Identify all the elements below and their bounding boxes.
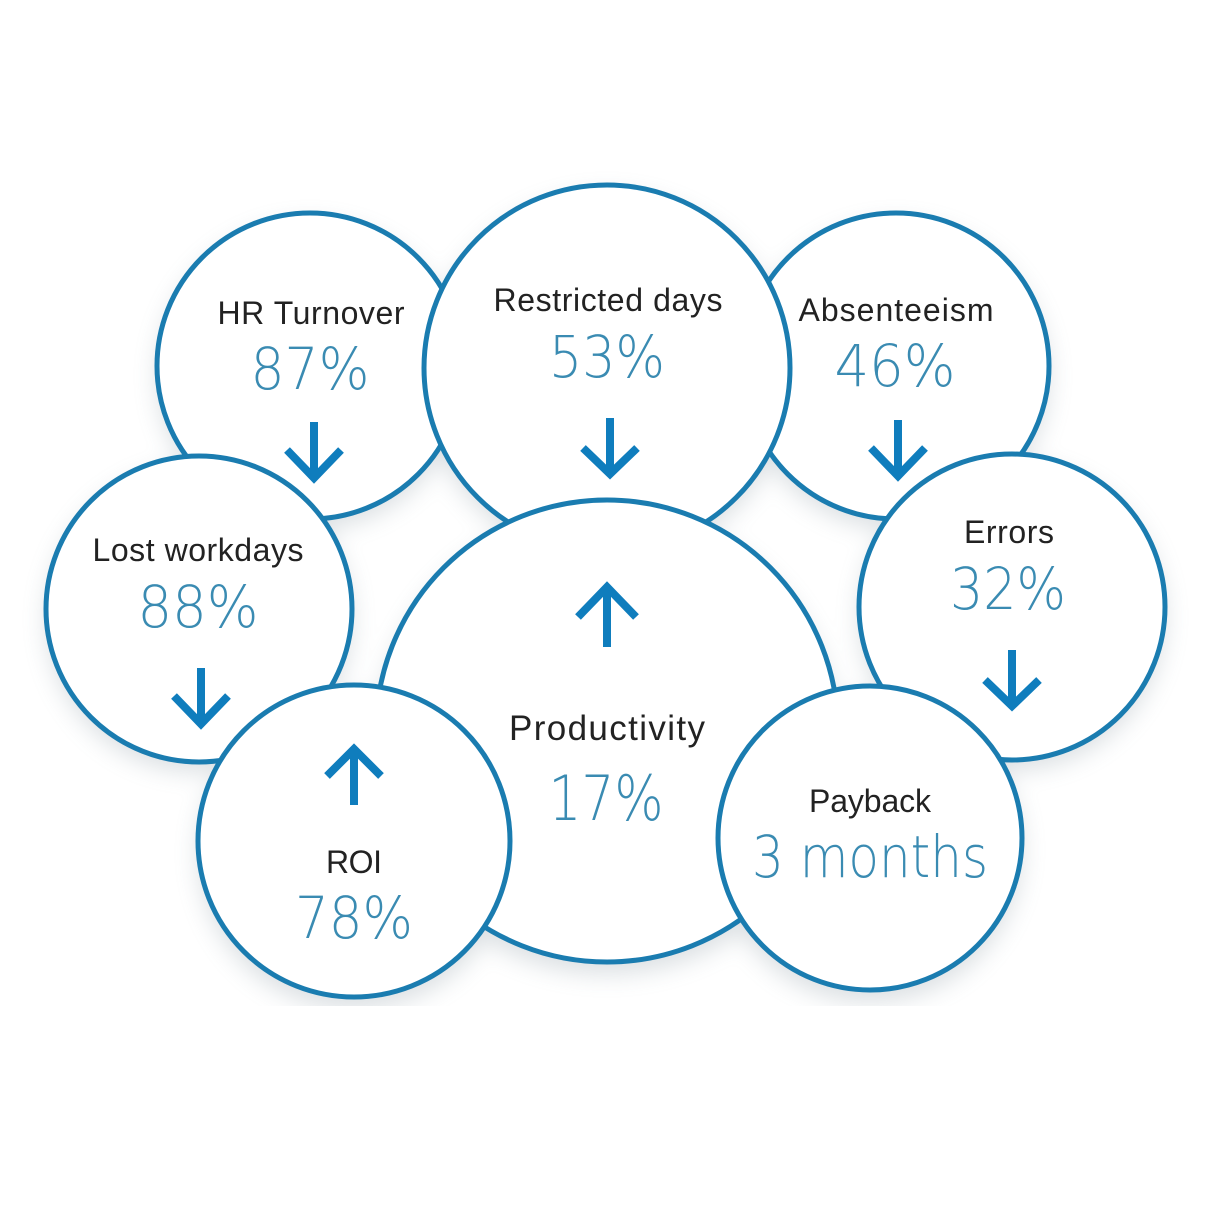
label: ROI: ROI — [326, 844, 382, 880]
arrow: down — [174, 668, 228, 724]
circle: Productivity — [376, 500, 838, 962]
value: 17%: 17% — [548, 762, 664, 835]
circle: Lost workdays — [46, 456, 352, 762]
label: Absenteeism: Absenteeism — [798, 292, 994, 328]
label: Productivity: Productivity — [509, 709, 706, 748]
circle: Absenteeism — [743, 213, 1049, 519]
value: 78%: 78% — [295, 884, 413, 952]
circle: Restricted days — [424, 185, 790, 551]
arrow: down — [985, 650, 1039, 706]
label: Lost workdays: Lost workdays — [92, 532, 304, 568]
value: 53%: 53% — [549, 323, 665, 391]
value: 32%: 32% — [950, 555, 1066, 623]
circle: Errors — [859, 454, 1165, 760]
label: Restricted days: Restricted days — [494, 282, 722, 318]
arrow: down — [287, 422, 341, 478]
value: 88%: 88% — [138, 573, 258, 641]
label: HR Turnover: HR Turnover — [218, 295, 405, 331]
circle: ROI — [198, 685, 510, 997]
arrow: down — [583, 418, 637, 474]
value: 3 months: 3 months — [752, 823, 988, 891]
arrow: up — [327, 749, 381, 805]
label: Payback: Payback — [809, 783, 932, 819]
circle: HR Turnover — [157, 213, 463, 519]
circle: Payback — [718, 686, 1022, 990]
label: Errors: Errors — [964, 514, 1054, 550]
value: 87%: 87% — [250, 335, 370, 403]
soft shadow — [46, 195, 1165, 1009]
arrow: up — [578, 587, 636, 647]
arrow: down — [871, 420, 925, 476]
value: 46%: 46% — [834, 332, 956, 400]
